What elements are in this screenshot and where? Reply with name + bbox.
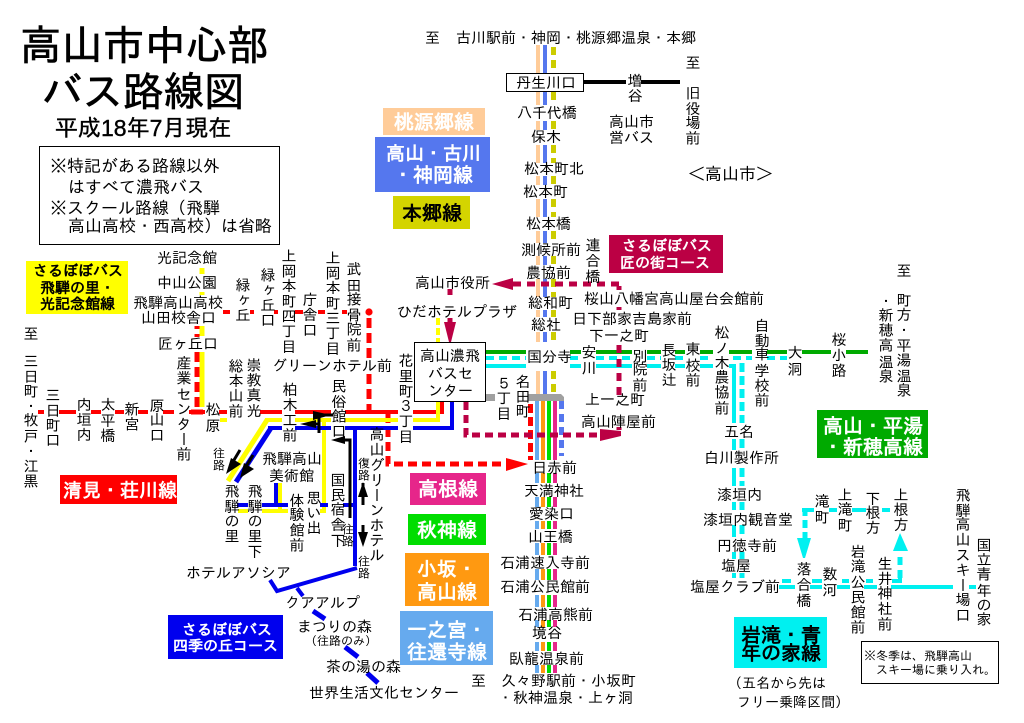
station labels: south-west loop: クアアルプ [285,595,360,612]
route label: Takayama-Hirayu-Shinhotaka [817,410,928,459]
route label: Hongo [393,196,470,229]
route label: Akigami: 秋神線 [417,519,477,542]
station labels: east line: 桜山八幡宮高山屋台会館前 [584,291,764,308]
route label: Saruboba Takumi no Machi [609,235,723,273]
station labels: north trunk: 旧役場前 [684,85,700,146]
route label: Takayama-Hirayu-Shinhotaka: ・新穂高線 [823,436,923,459]
black city bus line [583,80,680,84]
red markers and arrowhead [365,308,528,471]
station labels: south trunk: 日赤前 [532,460,577,477]
station labels: Iwataki line [690,424,992,635]
station labels: Iwataki line: 漆垣内 [717,487,762,504]
route label: Hongo: 本郷線 [402,202,462,225]
station labels: north trunk: 至 [684,54,700,69]
route label: Iwataki-Seinen no Ie [734,617,827,668]
station labels: west line: 山田校舎口 [141,310,216,327]
route label: Osaka-Takayama: 高山線 [417,581,477,604]
bus center box [414,342,486,402]
station labels: west line: 民俗館口 [330,378,346,438]
title: 平成18年7月現在 [55,115,231,141]
station labels: Iwataki line: 国立青年の家 [974,537,992,627]
station labels: east line: ・新穂高温泉 [876,293,894,384]
route label: Togenkyo: 桃源郷線 [394,111,474,134]
station labels: west line: 上岡本町四丁目 [280,248,296,353]
station labels: south trunk: 久々野駅前・小坂町 [501,673,636,690]
station labels: Iwataki line: 漆垣内観音堂 [703,512,793,529]
station labels: north trunk: 高山市 [609,114,654,131]
station labels: south trunk [471,460,636,707]
station labels: south trunk: 天満神社 [524,483,584,500]
route label: Saruboba four seasons: さるぼぼバス [182,621,272,639]
station labels: south-west loop: 往路 [212,447,226,471]
route label: Takayama-Furukawa-Kamioka: 高山・古川 [386,143,481,165]
crimson arrowheads [444,278,621,441]
station labels: east line: 下一之町 [589,328,649,345]
title [20,22,269,141]
grey shared section [486,394,564,401]
station labels: south-west loop: 飛騨の里 [222,483,240,543]
station labels: west line: グリーンホテル前 [272,358,392,375]
station labels: west line: ５丁目 [494,375,512,420]
black route arrows [226,411,368,547]
station labels: east line: 上一之町 [585,392,645,409]
station labels: south trunk: 臥龍温泉前 [509,651,584,668]
station labels: Iwataki line: 落合橋 [794,562,812,607]
station labels: west line: 緑ヶ丘 [234,277,250,322]
station labels: south trunk: 山王橋 [528,529,573,546]
station labels: west line: 崇教真光 [244,358,262,418]
note box: winter service [862,642,998,684]
note box: operators: ※スクール路線（飛騨 [50,199,220,218]
route label: Ichinomiya-Okanji: 往還寺線 [407,641,487,664]
station labels: west line: 総本山前 [226,358,244,419]
station labels: south trunk: 至 [471,673,486,690]
station labels: north trunk: 農協前 [526,265,571,282]
bus center box: 高山濃飛 [420,348,480,365]
route label: Akigami [408,514,486,545]
route line: yellow Saruboba Hida no Sato [202,268,438,513]
station labels: Iwataki line: 塩屋クラブ前 [690,579,780,596]
station labels: east line: 東校前 [684,342,700,388]
station labels: south-west loop: 思い出 [304,490,322,535]
title: 高山市中心部 [20,22,269,69]
station labels: Iwataki line: 飛騨高山スキー場口 [954,487,970,622]
route label: Osaka-Takayama: 小坂・ [417,559,477,581]
station labels: west line: 飛騨高山高校 [133,295,223,312]
route label: Takane [410,473,486,505]
stop box: Nyukawaguchi: 丹生川口 [516,75,576,92]
route label: Saruboba Hida no Sato: 飛騨の里・ [40,280,115,297]
route line: Iwataki cyan [486,358,976,587]
station labels: Iwataki line: 上根方 [892,487,908,532]
station labels: south-west loop: まつりの森 [297,619,372,636]
station labels: east line: 自動車学校前 [752,317,770,408]
bus center box: バスセ [428,366,473,383]
station labels: west line: 緑ヶ丘口 [258,267,276,327]
station labels: east line: 松ノ木農協前 [712,325,730,416]
route label: Takane: 高根線 [418,478,478,501]
note: free boarding section [728,675,849,710]
station labels: west line: 柏木工前 [280,382,298,443]
station labels: east line: 別院前 [630,347,648,393]
cyan arrowheads [797,533,908,558]
note box: winter service: ※冬季は、飛騨高山 [864,649,972,663]
station labels: Iwataki line: 塩屋 [721,558,751,575]
station labels: north trunk: 古川駅前・神岡・桃源郷温泉・本郷 [456,30,696,47]
station labels: west line: 上岡本町三丁目 [324,250,340,355]
route label: Ichinomiya-Okanji: 一之宮・ [407,619,487,642]
station labels: north trunk: 高山市役所 [415,275,490,292]
route label: Kiyomi-Shokawa: 清見・荘川線 [63,480,177,502]
station labels: east line: 大洞 [786,345,802,376]
station labels: south-west loop: 飛騨高山 [262,451,322,468]
station labels: west line: 新宮 [122,402,140,432]
station labels: east line: 安川 [580,345,596,375]
station labels: south-west loop: 国民宿舎下 [328,472,346,547]
station labels: south-west loop [186,427,459,702]
station labels: north trunk: 増谷 [626,72,642,102]
station labels: south trunk: 境谷 [532,625,562,642]
note box: operators: 高山高校・西高校）は省略 [68,217,272,236]
route label: Saruboba Hida no Sato: 光記念館線 [40,296,115,313]
station labels: east line: 町方・平湯温泉 [894,292,912,398]
station labels: south-west loop: 茶の湯の森 [326,659,401,676]
station labels: west line: 産業センター前 [174,356,192,462]
station labels: north trunk: 営バス [609,130,654,147]
note box: operators: ※特記がある路線以外 [50,157,220,176]
bus center box: ンター [428,383,473,400]
station labels: north trunk: 松本町 [523,184,568,201]
station labels: west line: 至 [22,325,38,340]
note box: operators [40,146,280,244]
route label: Saruboba four seasons [168,615,283,659]
station labels: east line: 日下部家吉島家前 [572,311,692,328]
station labels: south-west loop: ホテルアソシア [186,565,291,582]
station labels: Iwataki line: 白川製作所 [704,450,779,467]
station labels: south trunk: 石浦高熊前 [518,607,593,624]
route label: Takayama-Furukawa-Kamioka: ・神岡線 [393,164,473,187]
route label: Saruboba Takumi no Machi: さるぼぼバス [622,237,712,255]
station labels: south-west loop: 往路 [357,555,371,579]
station labels: east line: 長坂辻 [660,342,676,387]
station labels: Iwataki line: 円徳寺前 [717,538,777,555]
note box: winter service: スキー場に乗り入れ。 [876,663,996,677]
station labels: south trunk: 愛染口 [529,506,574,523]
route line: Takayama-Furukawa-Kamioka trunk [538,45,554,394]
station labels: south-west loop: 美術館 [269,468,314,485]
route line: Takumi no Machi course crimson [450,284,622,435]
diagonal yellow and blue lines [228,420,271,482]
station labels: east line: 至 [894,262,912,277]
route label: Osaka-Takayama [405,553,489,606]
station labels: south-west loop: 世界生活文化センター [309,685,459,702]
route label: Iwataki-Seinen no Ie: 年の家線 [741,642,821,665]
station labels: west line: 原山口 [148,397,164,442]
station labels: south-west loop: 飛騨の里下 [246,483,262,558]
station labels: north trunk [397,30,773,366]
route line: lower trunk [530,401,562,673]
station labels: north trunk: 連合橋 [584,238,600,283]
station labels: south-west loop: 高山グリーンホテル [368,427,384,562]
station labels: west line: 太平橋 [98,397,116,442]
station labels: west line: 武田接骨院前 [344,262,362,353]
title: バス路線図 [42,69,244,115]
station labels: west line: 匠ヶ丘口 [158,336,218,353]
station labels: north trunk: 総和町 [528,295,573,312]
station labels: south-west loop: 往路 [341,523,355,547]
station labels: north trunk: ひだホテルプラザ [397,304,517,321]
station labels: north trunk: 八千代橋 [517,105,577,122]
route label: Takayama-Furukawa-Kamioka [375,137,490,192]
station labels: south-west loop: 復路 [357,457,371,481]
route line: Kiyomi-Shokawa red [38,312,506,464]
station labels: Iwataki line: 上滝町 [836,487,852,532]
station labels: east line: 桜小路 [830,332,846,377]
route line: Saruboba four seasons blue [237,402,452,683]
station labels: west line: 光記念館 [157,250,217,267]
station labels: south-west loop: 体験館前 [288,492,304,553]
station labels: north trunk: 総社 [531,317,561,334]
station labels: north trunk: ＜高山市＞ [688,165,773,184]
station labels: south trunk: ・秋神温泉・上ヶ洞 [498,690,633,707]
station labels: east line: 高山陣屋前 [581,414,656,431]
station labels: west line [22,248,530,488]
station labels: Iwataki line: 岩滝公民館前 [848,544,866,635]
station labels: west line: 中山公園 [157,275,217,292]
station labels: west line: 花里町３丁目 [396,353,414,443]
station labels: Iwataki line: 滝町 [812,494,830,524]
station labels: south trunk: 石浦公民館前 [500,579,590,596]
note: free boarding section: （五名から先は [728,675,826,691]
station labels: south trunk: 石浦速入寺前 [500,555,590,572]
station labels: west line: 名田町 [514,373,530,418]
station labels: north trunk: 松本町北 [524,161,584,178]
route label: Saruboba four seasons: 四季の丘コース [173,638,278,655]
station labels: Iwataki line: 数河 [820,567,838,597]
station labels: west line: 三日町・牧戸・江黒 [22,353,38,488]
station labels: north trunk: 国分寺 [527,349,572,366]
station labels: west line: 松原 [204,402,220,433]
route label: Togenkyo [383,108,485,135]
station labels: west line: 庁舎口 [300,292,318,337]
route label: Saruboba Takumi no Machi: 匠の街コース [620,255,710,272]
station labels: Iwataki line: 下根方 [864,490,880,535]
station labels: Iwataki line: 生井神社前 [876,556,892,632]
station labels: south-west loop: （往路のみ） [305,634,377,648]
route label: Takayama-Hirayu-Shinhotaka: 高山・平湯 [823,416,923,438]
station labels: north trunk: 保木 [531,129,561,146]
station labels: north trunk: 測候所前 [521,242,581,259]
station labels: north trunk: 至 [425,30,440,47]
station labels: west line: 内垣内 [74,397,92,442]
route label: Saruboba Hida no Sato: さるぼぼバス [33,262,123,280]
note box: operators: はすべて濃飛バス [68,178,204,197]
route label: Ichinomiya-Okanji [400,611,493,665]
station labels: east line [572,262,912,431]
route line: Takayama-Hirayu green [486,350,868,354]
station labels: north trunk: 松本橋 [526,216,571,233]
route label: Saruboba Hida no Sato [26,261,128,314]
station labels: Iwataki line: 五名 [724,424,754,441]
station labels: west line: 三日町口 [44,387,60,447]
route label: Iwataki-Seinen no Ie: 岩滝・青 [741,625,821,647]
note: free boarding section: フリー乗降区間） [737,694,849,710]
